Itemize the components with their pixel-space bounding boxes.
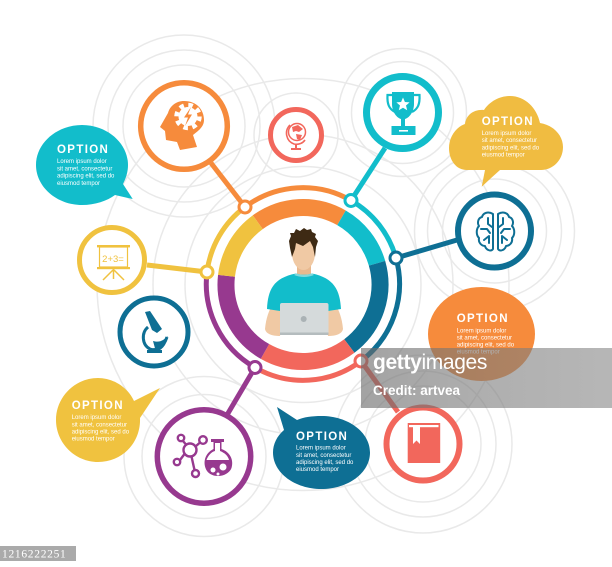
person with laptop <box>265 228 343 336</box>
callout: orange option bubble: sit amet, consectetur <box>457 335 512 341</box>
callout: blue option bubble: OPTION <box>296 431 348 443</box>
callout: yellow option bubble: adipiscing elit, sed do <box>72 429 130 435</box>
callout: orange option bubble <box>428 287 535 381</box>
callout: teal option bubble: sit amet, consectetur <box>57 166 112 172</box>
watermark band <box>361 348 612 408</box>
callout: orange option bubble: eiusmod tempor <box>457 349 500 355</box>
callout: yellow cloud option bubble: sit amet, consectetur <box>482 138 537 144</box>
callout: orange option bubble: OPTION <box>457 313 509 325</box>
callout: yellow cloud option bubble: OPTION <box>482 116 534 128</box>
watermark band: gettyimages <box>373 351 487 374</box>
icon node: yellow presentation board: 2+3= <box>102 254 124 265</box>
icon node: blue brain <box>458 194 531 268</box>
callout: yellow option bubble: Lorem ipsum dolor <box>72 415 121 421</box>
icon node: purple molecule and flask <box>157 410 251 503</box>
watermark band: Credit: artvea <box>373 383 461 398</box>
callout: yellow option bubble <box>56 378 160 462</box>
callout: teal option bubble <box>36 125 133 205</box>
callout: yellow cloud option bubble <box>449 96 563 187</box>
image id tag: 1216222251 <box>2 548 66 560</box>
callout: yellow option bubble: OPTION <box>72 400 124 412</box>
callout: orange option bubble: adipiscing elit, sed do <box>457 342 515 348</box>
callout: yellow cloud option bubble: eiusmod tempor <box>482 152 525 158</box>
callout: orange option bubble: Lorem ipsum dolor <box>457 328 506 334</box>
icon node: teal trophy <box>366 76 438 148</box>
callout: teal option bubble: eiusmod tempor <box>57 181 100 187</box>
callout: blue option bubble: eiusmod tempor <box>296 467 339 473</box>
callout: teal option bubble: Lorem ipsum dolor <box>57 159 107 165</box>
callout: yellow cloud option bubble: adipiscing elit, sed do <box>482 145 540 151</box>
central segmented ring <box>226 208 380 362</box>
callout: teal option bubble: adipiscing elit, sed do <box>57 174 115 180</box>
icon node: blue microscope <box>120 298 188 366</box>
image id tag <box>0 546 76 561</box>
callout: yellow cloud option bubble: Lorem ipsum dolor <box>482 131 531 137</box>
outer ring with connectors <box>147 148 457 415</box>
callout: teal option bubble: OPTION <box>57 144 109 156</box>
callout: blue option bubble <box>273 407 370 489</box>
callout: blue option bubble: Lorem ipsum dolor <box>296 446 346 452</box>
icon node: orange head with gear <box>141 83 227 169</box>
icon node: yellow presentation board <box>80 228 144 292</box>
icon node: coral book <box>386 408 460 480</box>
callout: blue option bubble: adipiscing elit, sed do <box>296 460 354 466</box>
callout: yellow option bubble: eiusmod tempor <box>72 436 115 442</box>
callout: yellow option bubble: sit amet, consectetur <box>72 422 127 428</box>
callout: blue option bubble: sit amet, consectetur <box>296 453 351 459</box>
icon node: coral globe <box>270 110 322 160</box>
